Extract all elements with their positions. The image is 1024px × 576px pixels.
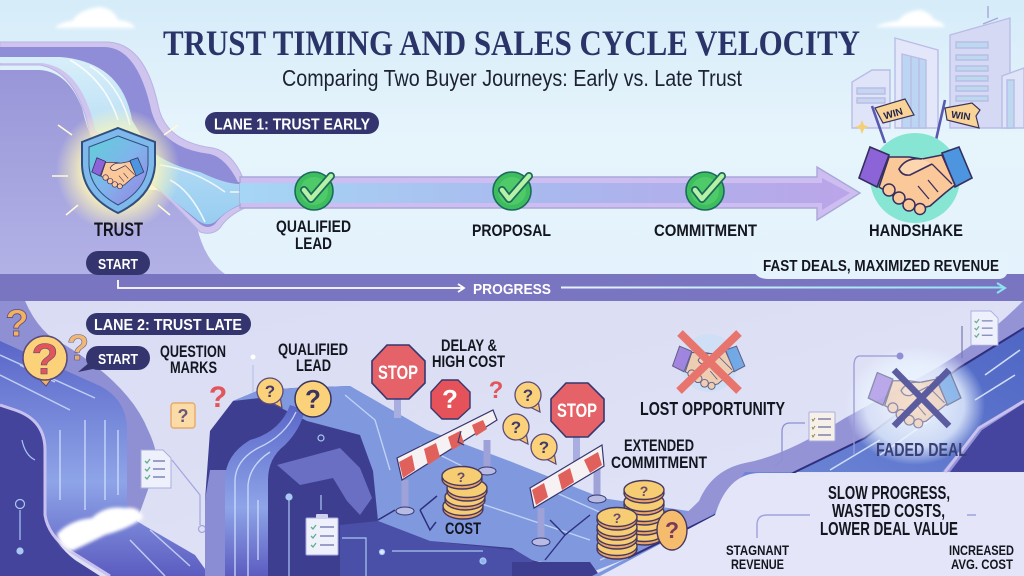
sky background <box>0 0 1024 276</box>
barrier 2 <box>530 445 606 560</box>
label: extended commitment: EXTENDED <box>624 436 694 455</box>
icon: question square <box>171 403 195 428</box>
label: question marks: QUESTION <box>160 342 226 361</box>
question marks cluster <box>5 303 89 386</box>
stop sign 2 <box>551 383 604 481</box>
lane 1 heading pill <box>205 112 379 134</box>
question marks cluster: ? <box>5 303 29 345</box>
lane 1 labels <box>94 217 963 253</box>
start pill lane 2: START <box>98 351 138 368</box>
checkpoint: proposal <box>493 172 531 210</box>
faded deal icon <box>845 345 985 465</box>
icon: red question mark: ? <box>209 381 227 414</box>
upper cliff <box>0 70 228 276</box>
label: proposal: PROPOSAL <box>472 221 551 240</box>
label: qualified lead lane 2: LEAD <box>296 356 331 375</box>
progress axis <box>118 280 1005 298</box>
callout: outcome summary: WASTED COSTS, <box>832 501 945 521</box>
coin stacks extended: ? <box>665 517 679 543</box>
win flags: WIN <box>883 106 904 122</box>
label: commitment: COMMITMENT <box>654 221 758 240</box>
question marks cluster: ? <box>67 327 89 368</box>
callout: outcome summary: LOWER DEAL VALUE <box>820 519 958 539</box>
start pill lane 1: START <box>98 256 138 273</box>
label: qualified lead lane 2 <box>278 340 348 375</box>
win flags: WIN <box>950 110 971 123</box>
central circuit lines <box>286 435 486 576</box>
subtitle: Comparing Two Buyer Journeys: Early vs. Late Trust <box>282 65 743 91</box>
label: trust: TRUST <box>94 220 143 241</box>
progress axis: PROGRESS <box>473 281 551 298</box>
icon: large question coin: ? <box>305 384 321 414</box>
checkpoint: qualified lead <box>295 172 333 210</box>
central rock <box>205 386 595 576</box>
label: faded deal: FADED DEAL <box>876 440 967 460</box>
lower lane background <box>0 300 1024 576</box>
question bubbles: ? <box>511 418 521 437</box>
icon: speech bubble question <box>257 378 283 408</box>
stop sign 1: STOP <box>378 363 418 384</box>
question bubbles: ? <box>539 438 549 457</box>
label: qualified lead lane 2: QUALIFIED <box>278 340 348 359</box>
coin stack cost: ? <box>457 469 465 485</box>
label: lost opportunity: LOST OPPORTUNITY <box>640 399 785 419</box>
lane 1 progress arrow <box>240 167 860 220</box>
coin stack cost <box>442 466 487 519</box>
question bubbles: ? <box>523 386 533 405</box>
icon: question stop sign <box>431 380 470 419</box>
start pill lane 2 <box>78 346 150 372</box>
bottom right panel <box>600 473 1024 576</box>
lost opportunity icon <box>673 333 745 392</box>
icon: question square: ? <box>178 406 188 426</box>
win flags <box>855 99 980 143</box>
label: stagnant revenue: REVENUE <box>731 556 784 572</box>
stop sign 1 <box>372 345 425 418</box>
icon: question stop sign: ? <box>442 384 458 414</box>
left purple slope <box>0 301 156 540</box>
icon: document checklist <box>141 450 171 488</box>
icon: central clipboard <box>306 514 338 555</box>
icon: right document <box>962 311 998 358</box>
label: stagnant revenue: STAGNANT <box>726 542 789 558</box>
label: question marks <box>160 342 226 377</box>
coin stacks extended: ? <box>613 510 621 526</box>
callout: outcome summary: SLOW PROGRESS, <box>828 483 950 503</box>
trust shield icon <box>52 108 180 232</box>
callout: outcome summary <box>820 483 958 539</box>
left circuit lines <box>16 354 256 554</box>
coin stacks extended <box>597 480 687 559</box>
central waterfall <box>225 405 305 576</box>
road descending <box>233 386 715 572</box>
question marks cluster: ? <box>32 335 58 384</box>
dark lower-right corner <box>950 403 1024 472</box>
rising stream <box>592 328 1024 576</box>
cloud left <box>55 7 135 28</box>
barrier 1 <box>378 410 497 530</box>
rising purple band <box>592 300 1024 576</box>
label: delay and high cost <box>432 336 505 371</box>
stop sign 2: STOP <box>557 401 597 422</box>
dark rock base right <box>512 562 600 576</box>
label: qualified lead <box>276 217 351 253</box>
icon: speech bubble question: ? <box>265 382 275 401</box>
handshake win icon <box>859 133 972 223</box>
fast deals callout <box>752 252 1008 279</box>
label: extended commitment <box>611 436 708 472</box>
lane 1 heading pill: LANE 1: TRUST EARLY <box>214 116 370 134</box>
checkpoint: commitment <box>686 172 724 210</box>
label: question marks: MARKS <box>170 358 217 377</box>
foam at waterfall base <box>57 507 143 551</box>
start pill lane 1 <box>86 251 150 275</box>
left waterfall <box>0 341 210 576</box>
label: delay and high cost: DELAY & <box>441 336 497 355</box>
label: stagnant revenue <box>726 542 789 572</box>
icon: right clipboard <box>775 412 835 466</box>
cloud right <box>875 10 945 27</box>
coin stacks extended: ? <box>640 483 648 499</box>
label: delay and high cost: HIGH COST <box>432 352 505 371</box>
question bubbles <box>503 382 557 464</box>
left dark cavern <box>0 405 100 576</box>
icon: small red question: ? <box>489 377 503 404</box>
label: cost: COST <box>445 519 481 538</box>
label: qualified lead: QUALIFIED <box>276 217 351 236</box>
title: TRUST TIMING AND SALES CYCLE VELOCITY <box>163 23 860 63</box>
upper river channel <box>0 42 300 233</box>
icon: large question coin <box>295 381 331 417</box>
label: extended commitment: COMMITMENT <box>611 453 708 472</box>
city buildings <box>852 6 1024 128</box>
stagnant revenue connector <box>757 515 976 538</box>
label: qualified lead: LEAD <box>295 234 332 253</box>
progress band <box>0 274 1024 301</box>
lane 2 heading pill: LANE 2: TRUST LATE <box>94 317 242 334</box>
label: increased avg cost <box>949 542 1014 572</box>
label: handshake: HANDSHAKE <box>869 221 963 240</box>
